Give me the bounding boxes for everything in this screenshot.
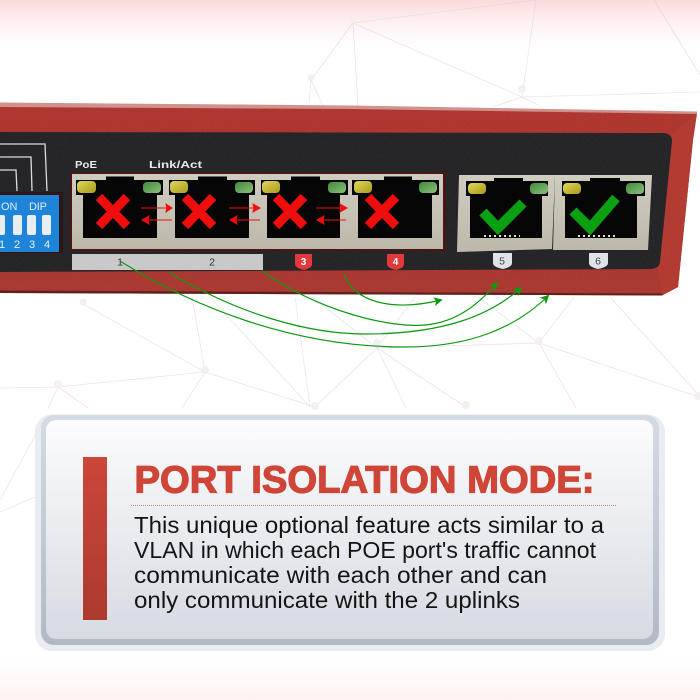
ports 1-4 metal frame	[70, 172, 446, 251]
panel frame	[35, 414, 665, 651]
port labels 1 and 2: 2	[209, 256, 215, 268]
DIP switch block: 3	[29, 239, 35, 251]
body text: VLAN in which each POE port's traffic cannot	[134, 537, 597, 563]
DIP switch block: 2	[14, 239, 20, 251]
port 1	[76, 176, 163, 238]
DIP switch block: 4	[44, 239, 50, 251]
DIP switch block: DIP	[29, 201, 47, 213]
port label 3: 3	[301, 257, 307, 268]
port labels 1 and 2	[72, 254, 263, 270]
red housing	[0, 102, 697, 296]
info panel	[35, 414, 665, 651]
body text: This unique optional feature acts similar to a	[134, 512, 604, 538]
port label 5	[493, 253, 512, 269]
port 5	[457, 175, 555, 252]
port 3	[261, 176, 348, 238]
DIP switch block	[0, 192, 63, 253]
port label 5: 5	[499, 256, 505, 268]
body text: only communicate with the 2 uplinks	[134, 587, 520, 613]
green check marks	[483, 198, 616, 228]
network status icon lines	[0, 144, 47, 191]
port label 6	[589, 253, 608, 269]
heading: PORT ISOLATION MODE:	[134, 460, 594, 502]
network switch device	[0, 102, 697, 296]
label: Link/Act: Link/Act	[149, 159, 203, 171]
network nodes	[54, 16, 700, 410]
label: PoE: PoE	[75, 159, 97, 171]
port label 3	[295, 254, 312, 270]
red X marks	[99, 197, 396, 226]
port label 6: 6	[595, 256, 601, 268]
DIP switch block: ON	[1, 201, 18, 213]
port labels 1 and 2: 1	[117, 256, 123, 268]
port 2	[169, 176, 255, 238]
body text: communicate with each other and can	[134, 562, 547, 588]
dotted divider	[131, 504, 617, 506]
red isolation arrows	[141, 204, 347, 224]
port label 4	[387, 254, 404, 270]
housing grain	[0, 103, 697, 296]
port label 4: 4	[393, 257, 399, 268]
green uplink arrows	[120, 261, 548, 347]
network pattern background	[0, 0, 700, 512]
body text	[134, 512, 604, 613]
black front panel	[0, 132, 672, 272]
port 6	[553, 175, 652, 250]
red accent bar	[83, 457, 107, 620]
port 4	[352, 176, 439, 238]
